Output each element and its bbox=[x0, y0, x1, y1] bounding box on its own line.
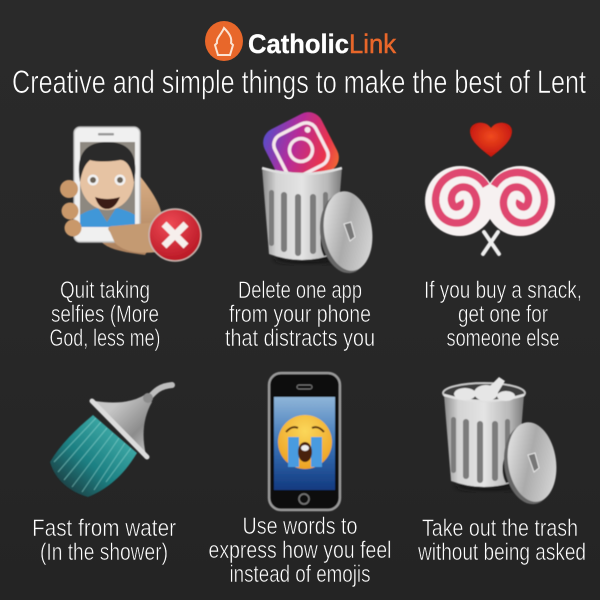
panel: fast from water bbox=[32, 385, 176, 566]
caption: someone else bbox=[446, 325, 560, 352]
caption: get one for bbox=[458, 301, 548, 328]
caption: from your phone bbox=[229, 301, 371, 328]
caption: (In the shower) bbox=[40, 539, 168, 566]
panel: quit taking selfies bbox=[50, 127, 201, 352]
icon: flame logo bbox=[205, 21, 243, 61]
caption: express how you feel bbox=[208, 537, 392, 564]
icon: shower head bbox=[50, 385, 172, 497]
icon: selfie phone with X bbox=[60, 127, 201, 261]
icon: full trash can with lid bbox=[443, 377, 561, 507]
caption: instead of emojis bbox=[230, 561, 370, 588]
caption: Delete one app bbox=[238, 277, 362, 304]
panel: use words instead of emojis bbox=[208, 373, 392, 588]
panel: delete one app bbox=[225, 107, 377, 352]
icon: instagram logo in trash can bbox=[258, 107, 377, 276]
icon: heart bbox=[470, 123, 512, 157]
caption: Fast from water bbox=[32, 515, 176, 542]
panel: take out the trash bbox=[417, 377, 586, 566]
caption: God, less me) bbox=[50, 325, 160, 352]
icon: crossed lollipops bbox=[425, 163, 555, 254]
caption: Quit taking bbox=[60, 277, 150, 304]
icon: phone with crying emoji bbox=[269, 373, 340, 510]
logo wordmark: CatholicLink bbox=[248, 29, 396, 59]
caption: that distracts you bbox=[225, 325, 375, 352]
logo: CatholicLink bbox=[205, 21, 396, 61]
caption: Use words to bbox=[242, 513, 358, 540]
panel: buy a snack for someone else bbox=[424, 123, 582, 352]
caption: selfies (More bbox=[51, 301, 159, 328]
